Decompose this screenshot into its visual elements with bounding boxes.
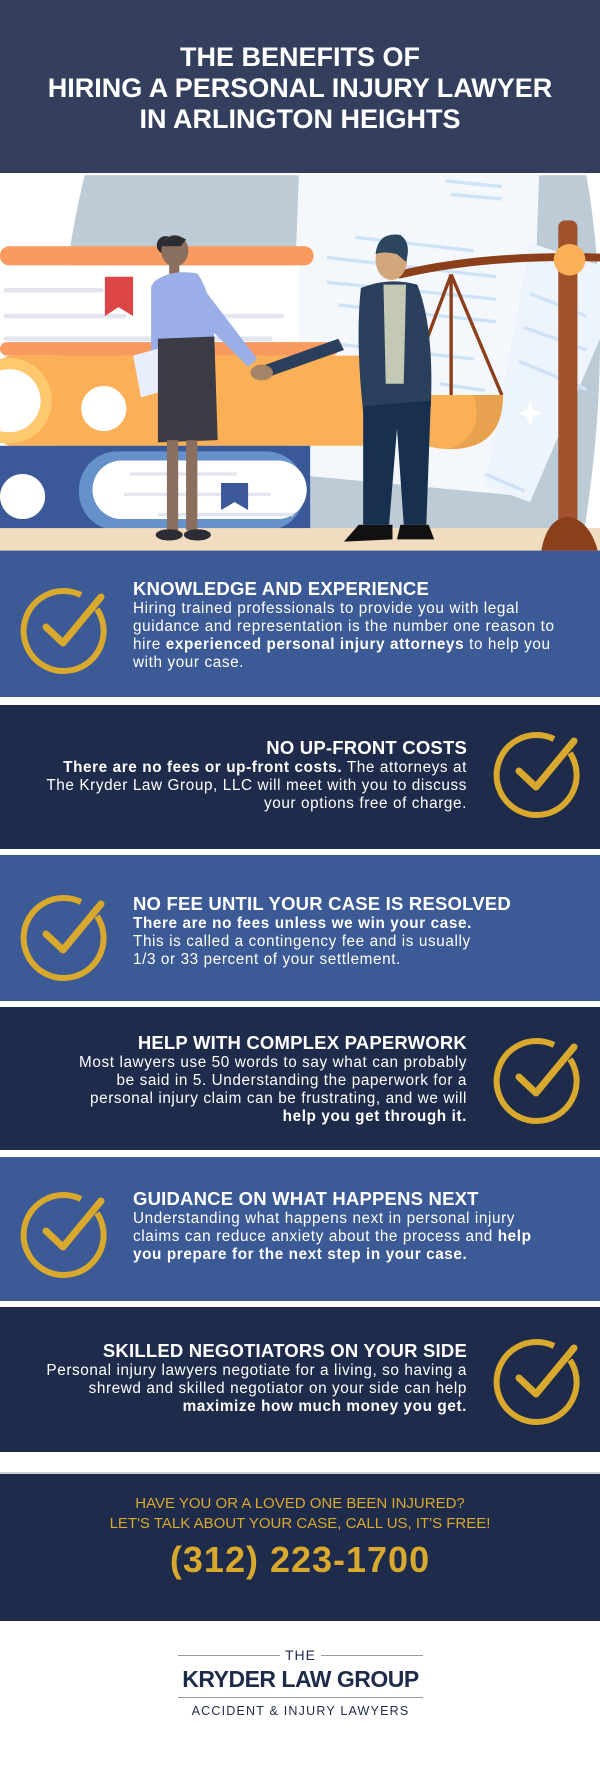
text: guidance: GUIDANCE ON WHAT HAPPENS NEXT (133, 1188, 479, 1209)
cta text: HAVE YOU OR A LOVED ONE BEEN INJURED? (135, 1495, 465, 1512)
call to action box (0, 1472, 600, 1621)
phone number: (312) 223-1700 (170, 1539, 430, 1580)
icon: check circle (494, 1339, 580, 1425)
text: no fee (133, 893, 511, 968)
panel: skilled negotiators (0, 1307, 600, 1452)
text: knowledge (133, 578, 555, 671)
cta text (110, 1495, 490, 1532)
title header: HIRING A PERSONAL INJURY LAWYER (48, 73, 552, 103)
text: negotiators: maximize how much money you get. (183, 1398, 467, 1415)
panel: no up-front costs (0, 705, 600, 849)
text: guidance: claims can reduce anxiety about the process and help (133, 1228, 532, 1245)
panel: guidance on what happens next (0, 1157, 600, 1301)
title header: THE BENEFITS OF (180, 42, 420, 72)
logo: The Kryder Law Group (178, 1647, 423, 1718)
text: no up-front: There are no fees or up-front costs. The attorneys at (63, 759, 467, 776)
panel: no fee until resolved (0, 855, 600, 1001)
text: no fee: This is called a contingency fee and is usually (133, 933, 471, 950)
text: knowledge: guidance and representation is the number one reason to (133, 618, 555, 635)
logo: The Kryder Law Group: THE (285, 1647, 316, 1663)
text: no up-front: NO UP-FRONT COSTS (266, 737, 467, 758)
text: no fee: 1/3 or 33 percent of your settlement. (133, 951, 401, 968)
text: paperwork: be said in 5. Understanding the paperwork for a (117, 1072, 467, 1089)
icon: check circle (494, 1038, 580, 1124)
text: no fee: NO FEE UNTIL YOUR CASE IS RESOLVED (133, 893, 511, 914)
text: paperwork: HELP WITH COMPLEX PAPERWORK (138, 1032, 467, 1053)
text: knowledge: KNOWLEDGE AND EXPERIENCE (133, 578, 429, 599)
text: no up-front (46, 737, 467, 812)
text: knowledge: hire experienced personal injury attorneys to help you (133, 636, 551, 653)
text: guidance (133, 1188, 532, 1263)
icon: check circle (20, 895, 107, 981)
icon: check circle (494, 732, 580, 818)
title header: IN ARLINGTON HEIGHTS (139, 104, 460, 134)
illustration: handshake with books and scales (0, 175, 600, 554)
text: guidance: you prepare for the next step in your case. (133, 1246, 467, 1263)
panel: knowledge and experience (0, 554, 600, 697)
title header (0, 0, 600, 173)
panel: complex paperwork (0, 1007, 600, 1150)
text: knowledge: with your case. (133, 654, 244, 671)
man (250, 235, 434, 542)
icon: check circle (20, 588, 107, 674)
text: knowledge: Hiring trained professionals to provide you with legal (133, 600, 519, 617)
scales (558, 220, 577, 536)
text: paperwork: help you get through it. (283, 1108, 467, 1125)
text: no up-front: your options free of charge. (264, 795, 467, 812)
woman (133, 235, 257, 540)
text: no up-front: The Kryder Law Group, LLC will meet with you to discuss (46, 777, 467, 794)
text: negotiators: shrewd and skilled negotiator on your side can help (89, 1380, 467, 1397)
text: no fee: There are no fees unless we win your case. (133, 915, 472, 932)
text: negotiators: Personal injury lawyers negotiate for a living, so having a (46, 1362, 467, 1379)
cta text: LET'S TALK ABOUT YOUR CASE, CALL US, IT'S FREE! (110, 1515, 490, 1532)
logo: The Kryder Law Group: ACCIDENT & INJURY LAWYERS (192, 1704, 409, 1718)
text: guidance: Understanding what happens next in personal injury (133, 1210, 515, 1227)
logo: The Kryder Law Group: KRYDER LAW GROUP (182, 1666, 419, 1692)
text: paperwork: personal injury claim can be frustrating, and we will (90, 1090, 467, 1107)
text: negotiators (46, 1340, 467, 1415)
text: paperwork: Most lawyers use 50 words to say what can probably (79, 1054, 467, 1071)
text: paperwork (79, 1032, 467, 1125)
text: negotiators: SKILLED NEGOTIATORS ON YOUR SIDE (103, 1340, 467, 1361)
icon: check circle (20, 1192, 107, 1278)
